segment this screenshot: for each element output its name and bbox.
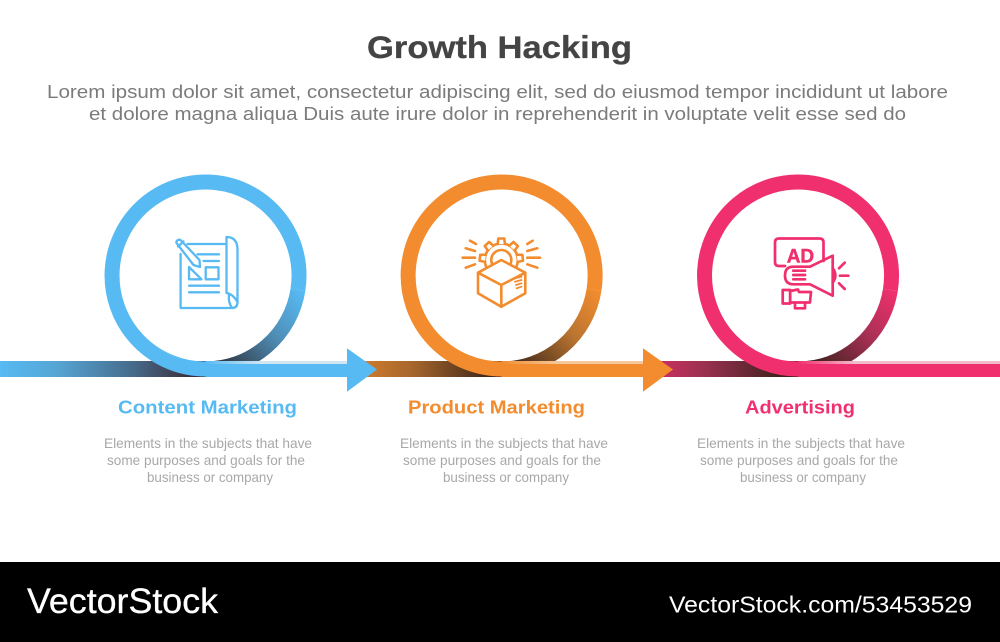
- text: Content Marketing description: Elements in the subjects that have: [104, 436, 312, 451]
- text: Advertising description: [697, 436, 905, 485]
- title: Growth Hacking: [367, 29, 632, 65]
- text: Content Marketing description: business or company: [147, 470, 273, 485]
- footer bar: VectorStock.com/53453529: [669, 592, 972, 618]
- text: Advertising description: business or company: [740, 470, 866, 485]
- footer bar: VectorStock: [27, 582, 219, 621]
- icon: blueprint document with pencil: [176, 237, 238, 308]
- step 3 ribbon: pink loop: [643, 182, 1000, 377]
- intro paragraph: et dolore magna aliqua Duis aute irure dolor in reprehenderit in voluptate velit esse sed do: [89, 104, 906, 124]
- step 2 ribbon: orange loop with arrow: [347, 182, 673, 392]
- icon: gear and box with rays: [463, 238, 540, 307]
- icon: AD megaphone: [775, 238, 848, 308]
- footer bar: [0, 562, 1000, 642]
- icon: AD megaphone: AD: [787, 245, 814, 267]
- text: Advertising description: Elements in the subjects that have: [697, 436, 905, 451]
- text: Content Marketing description: [104, 436, 312, 485]
- text: Advertising description: some purposes and goals for the: [700, 453, 898, 468]
- text: Product Marketing description: some purposes and goals for the: [403, 453, 601, 468]
- intro paragraph: Lorem ipsum dolor sit amet, consectetur adipiscing elit, sed do eiusmod tempor incididunt ut labore: [47, 82, 948, 102]
- text: Product Marketing description: [400, 436, 608, 485]
- text: Content Marketing description: some purposes and goals for the: [107, 453, 305, 468]
- heading: Advertising: Advertising: [745, 397, 855, 417]
- heading: Content Marketing: Content Marketing: [118, 397, 297, 417]
- intro paragraph: [47, 82, 948, 124]
- step 1 ribbon: blue loop with arrow: [0, 182, 377, 392]
- heading: Product Marketing: Product Marketing: [408, 397, 585, 417]
- text: Product Marketing description: Elements in the subjects that have: [400, 436, 608, 451]
- text: Product Marketing description: business or company: [443, 470, 569, 485]
